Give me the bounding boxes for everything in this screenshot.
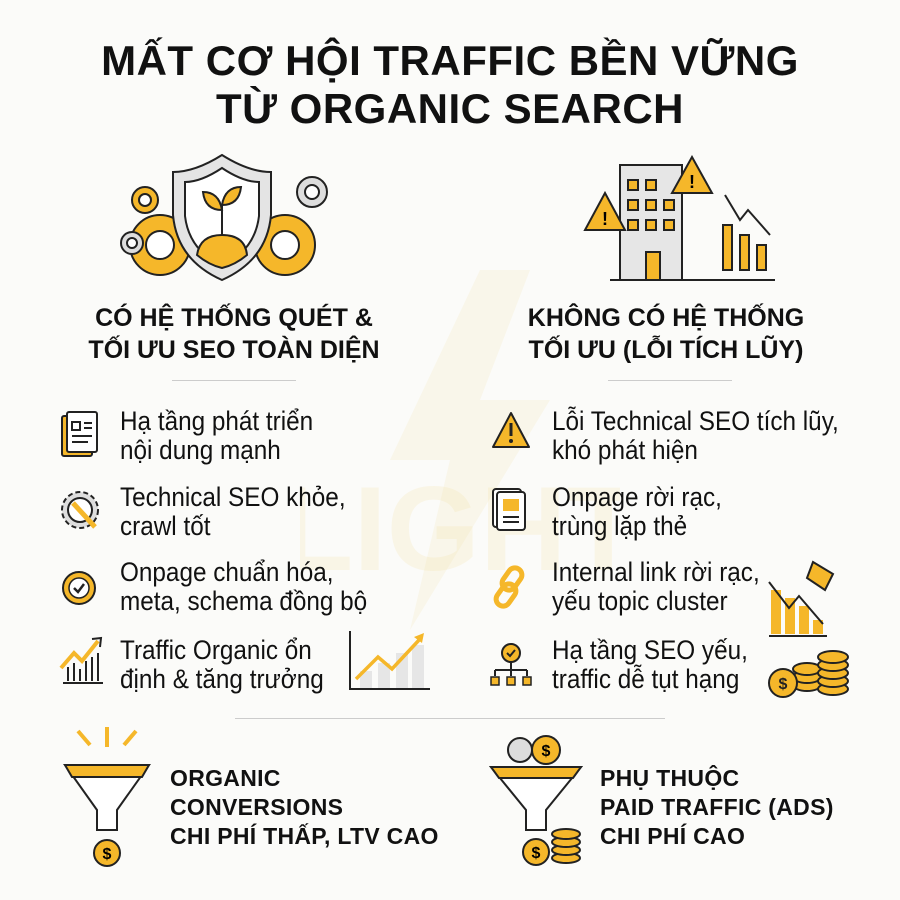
icon: cracked building with warnings and falling chart: !: [689, 172, 695, 192]
item 2: [552, 482, 722, 541]
icon: cracked building with warnings and falling chart: [583, 155, 775, 281]
icon: funnel with coins: [489, 735, 583, 866]
left list: [60, 406, 430, 694]
bottom left: organic conversions: [63, 727, 439, 867]
icon: stacked pages: [492, 488, 526, 531]
item 1: khó phát hiện: [552, 435, 698, 465]
item 4: traffic dễ tụt hạng: [552, 664, 739, 694]
item 2: [120, 482, 346, 541]
subheading right: [528, 303, 804, 364]
text: paid traffic: CHI PHÍ CAO: [600, 823, 745, 849]
item 3: Onpage chuẩn hóa,: [120, 557, 333, 587]
item 4: [120, 635, 324, 694]
icon: funnel with coins: $: [532, 845, 541, 862]
icon: shield with plant and gears: [120, 154, 328, 282]
right list: [490, 406, 849, 698]
item 2: Technical SEO khỏe,: [120, 482, 346, 512]
watermark logo: [300, 270, 620, 629]
item 4: Traffic Organic ổn: [120, 635, 312, 665]
icon: coins: $: [779, 676, 788, 693]
text: paid traffic: PHỤ THUỘC: [600, 765, 739, 791]
bottom right: paid traffic: [489, 735, 834, 866]
subheading right: KHÔNG CÓ HỆ THỐNG: [528, 304, 804, 332]
item 1: Hạ tầng phát triển: [120, 406, 313, 436]
icon: funnel with arrows and coin: [63, 727, 151, 867]
icon: chain link: [494, 565, 524, 609]
title: TỪ ORGANIC SEARCH: [216, 85, 684, 132]
subheading right: TỐI ƯU (LỖI TÍCH LŨY): [529, 336, 803, 364]
item 1: nội dung mạnh: [120, 435, 281, 465]
icon: funnel with arrows and coin: $: [103, 846, 112, 863]
icon: check circle: [62, 571, 96, 605]
item 3: [552, 557, 760, 616]
item 3: meta, schema đồng bộ: [120, 586, 367, 616]
item 4: [552, 635, 748, 694]
item 3: yếu topic cluster: [552, 586, 728, 616]
text: organic conversions: [170, 765, 439, 849]
item 2: trùng lặp thẻ: [552, 511, 687, 541]
item 1: [552, 406, 839, 465]
icon: gear wrench: [61, 491, 99, 529]
icon: coins: [768, 650, 849, 698]
item 2: crawl tốt: [120, 511, 210, 541]
text: organic conversions: ORGANIC: [170, 765, 281, 791]
chart: falling with tag: [768, 560, 834, 637]
title: [101, 37, 799, 132]
item 2: Onpage rời rạc,: [552, 482, 722, 512]
title: MẤT CƠ HỘI TRAFFIC BỀN VỮNG: [101, 37, 799, 84]
icon: cracked building with warnings and falling chart: !: [602, 209, 608, 229]
subheading left: [88, 303, 380, 364]
text: paid traffic: PAID TRAFFIC (ADS): [600, 794, 834, 820]
text: organic conversions: CHI PHÍ THẤP, LTV CAO: [170, 823, 439, 849]
item 1: [120, 406, 313, 465]
chart: rising: [349, 631, 430, 690]
item 3: Internal link rời rạc,: [552, 557, 760, 587]
subheading left: CÓ HỆ THỐNG QUÉT &: [95, 304, 373, 332]
item 4: Hạ tầng SEO yếu,: [552, 635, 748, 665]
item 3: [120, 557, 367, 616]
item 4: định & tăng trưởng: [120, 664, 324, 694]
icon: growth chart: [60, 636, 103, 684]
icon: funnel with coins: $: [542, 743, 551, 760]
icon: document: [61, 411, 98, 457]
subheading left: TỐI ƯU SEO TOÀN DIỆN: [88, 336, 380, 364]
icon: warning: [492, 412, 530, 448]
item 1: Lỗi Technical SEO tích lũy,: [552, 406, 839, 436]
icon: hierarchy: [490, 643, 532, 686]
text: organic conversions: CONVERSIONS: [170, 794, 343, 820]
text: paid traffic: [600, 765, 834, 849]
